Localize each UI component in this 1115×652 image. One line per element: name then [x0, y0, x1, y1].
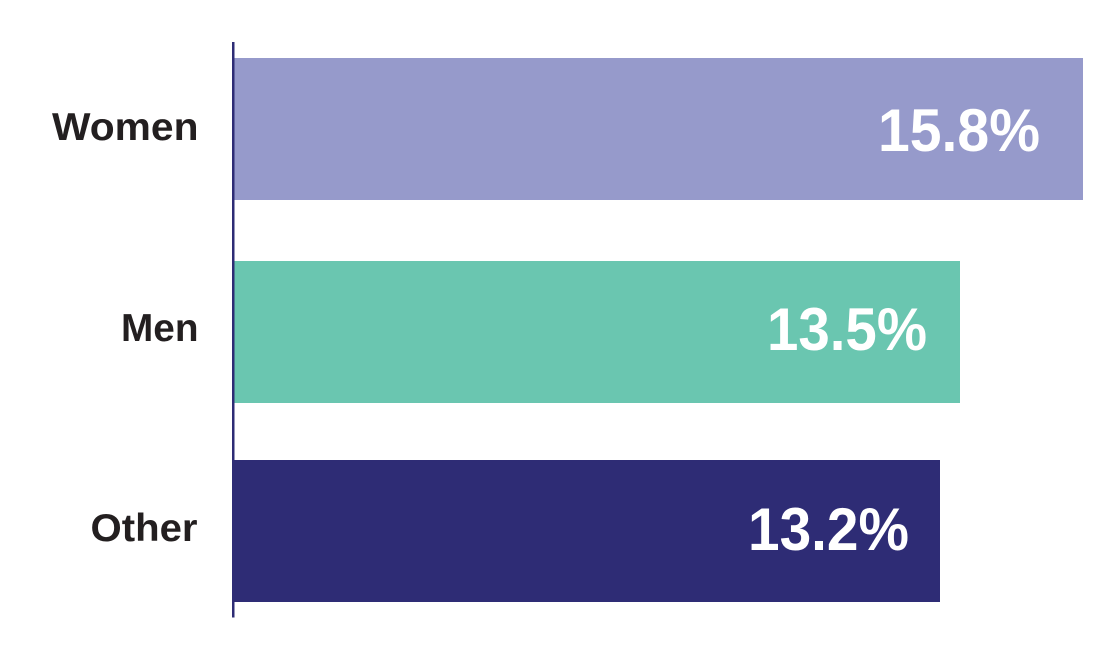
- bar: Women: [233, 58, 1083, 200]
- category label: Other: Other: [90, 507, 198, 550]
- bar: Men: [233, 261, 960, 403]
- bar: Men: 13.5%: [767, 296, 927, 363]
- category label: Women: Women: [52, 106, 199, 149]
- bar: Women: 15.8%: [878, 97, 1040, 164]
- axis line: [232, 42, 234, 618]
- bar: Other: [233, 460, 940, 602]
- bar: Other: 13.2%: [748, 496, 909, 563]
- category label: Men: Men: [121, 307, 198, 350]
